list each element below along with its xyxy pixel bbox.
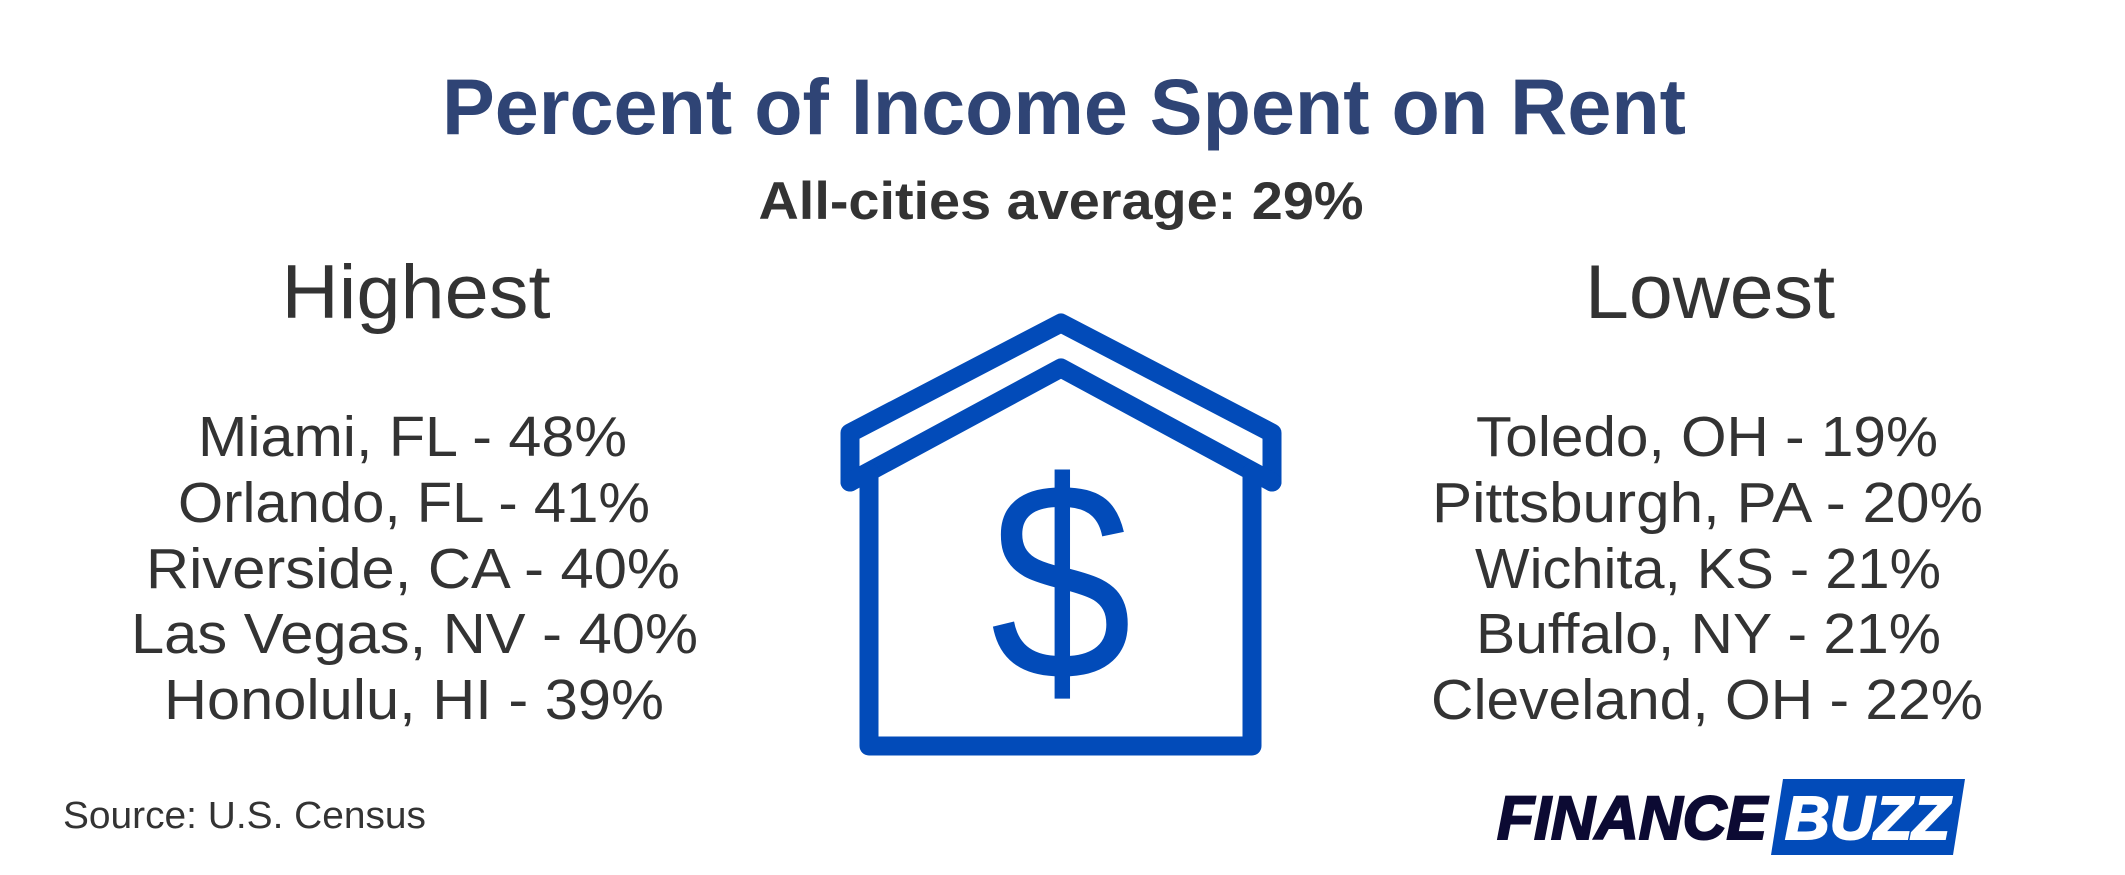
- title: Percent of Income Spent on Rent: [442, 62, 1686, 151]
- logo: BUZZ: [1785, 784, 1953, 852]
- list: lowest cities: Toledo, OH - 19%: [1476, 405, 1938, 469]
- list: lowest cities: Buffalo, NY - 21%: [1476, 602, 1941, 666]
- list: highest cities: Riverside, CA - 40%: [146, 537, 680, 601]
- logo: [1497, 779, 1965, 855]
- list: lowest cities: Pittsburgh, PA - 20%: [1432, 471, 1983, 535]
- icon: house with dollar: [850, 323, 1272, 746]
- heading: highest: Highest: [282, 250, 550, 335]
- list: highest cities: Miami, FL - 48%: [198, 405, 627, 469]
- list: lowest cities: Wichita, KS - 21%: [1475, 537, 1941, 601]
- list: highest cities: Orlando, FL - 41%: [178, 471, 650, 535]
- icon: house with dollar: $: [990, 424, 1132, 740]
- source: Source: U.S. Census: [63, 795, 426, 837]
- subtitle: All-cities average: 29%: [758, 172, 1364, 231]
- list: highest cities: Las Vegas, NV - 40%: [131, 602, 698, 666]
- logo: FINANCE: [1497, 784, 1769, 852]
- heading: lowest: Lowest: [1585, 250, 1835, 335]
- list: highest cities: Honolulu, HI - 39%: [164, 668, 664, 732]
- list: highest cities: [131, 405, 698, 732]
- list: lowest cities: [1431, 405, 1983, 732]
- list: lowest cities: Cleveland, OH - 22%: [1431, 668, 1983, 732]
